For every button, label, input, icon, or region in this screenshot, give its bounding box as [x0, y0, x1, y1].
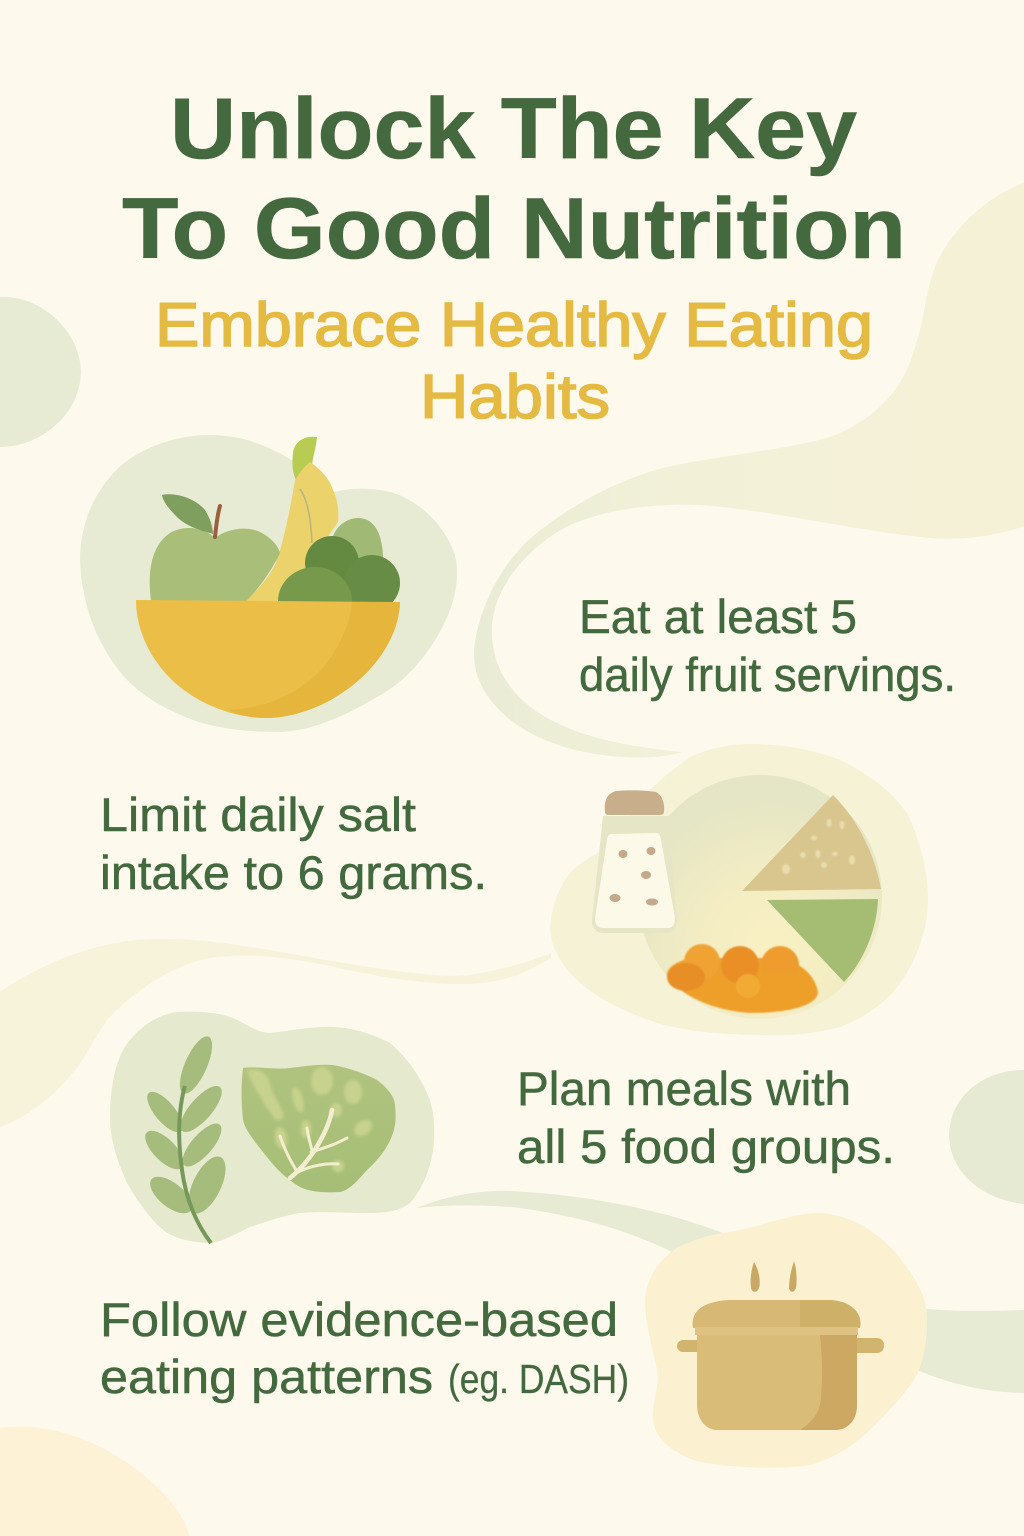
tip text: fruit servings [579, 590, 956, 701]
icon: herbs and leaf [110, 1012, 434, 1243]
dark green fruits [278, 536, 400, 635]
background wave: lower centre swoosh [416, 1191, 723, 1256]
title: Unlock The Key [170, 81, 857, 177]
tip text: plan meals: all 5 food groups. [517, 1120, 895, 1173]
tip text: fruit servings: daily fruit servings. [579, 648, 956, 701]
banana [245, 437, 338, 601]
orange food pile [667, 944, 818, 1013]
subtitle [155, 291, 873, 432]
icon: salt shaker and plate [550, 744, 928, 1035]
tip text: salt limit: intake to 6 grams. [100, 846, 487, 899]
pot lid shade [800, 1300, 860, 1328]
shaker glass [592, 816, 677, 933]
pot body [697, 1333, 857, 1430]
pot body shade [800, 1335, 857, 1430]
apple [150, 494, 280, 601]
tip text: salt limit [100, 788, 487, 899]
tip text: fruit servings: Eat at least 5 [579, 590, 857, 643]
pot handles [677, 1338, 884, 1353]
herbs backdrop blob [110, 1012, 434, 1243]
tip text: eating patterns: (eg. DASH) [448, 1356, 629, 1402]
grain specks [782, 819, 855, 874]
lettuce veins [280, 1110, 347, 1178]
back green fruit [331, 518, 383, 590]
background wave: lower right swoosh [905, 1308, 1024, 1393]
grain wedge [742, 795, 881, 891]
lettuce light patches [247, 1067, 375, 1172]
background wave: top right swoosh [474, 183, 1024, 757]
tip text: plan meals: Plan meals with [517, 1062, 851, 1115]
apple stem [215, 506, 220, 537]
title: To Good Nutrition [122, 181, 906, 277]
background blob: left edge [0, 297, 81, 447]
lettuce leaf [242, 1065, 396, 1192]
pot lid [693, 1300, 860, 1328]
plate backdrop blob [550, 744, 928, 1035]
shaker salt [595, 833, 675, 928]
tip text: eating patterns [100, 1293, 629, 1403]
tip text: plan meals [517, 1062, 895, 1173]
subtitle: Habits [420, 363, 610, 432]
sprig stem [179, 1086, 211, 1243]
fruit bowl backdrop blob [80, 435, 457, 732]
sprig leaves [139, 1032, 233, 1220]
steam [751, 1261, 797, 1292]
background wave: middle left swoosh [0, 939, 551, 1127]
plate [638, 775, 882, 1019]
icon: fruit bowl [80, 435, 457, 732]
tip text: eating patterns: eating patterns [100, 1350, 433, 1403]
title [122, 81, 906, 277]
pot lid band [695, 1327, 858, 1335]
subtitle: Embrace Healthy Eating [155, 291, 873, 360]
background blob: right edge [949, 1070, 1024, 1204]
bowl [136, 600, 400, 718]
icon: cooking pot [645, 1213, 927, 1468]
tip text: eating patterns: Follow evidence-based [100, 1293, 618, 1346]
bowl shade [228, 602, 400, 718]
green wedge [767, 899, 878, 982]
pot backdrop blob [645, 1213, 927, 1468]
background blob: bottom left corner [0, 1427, 190, 1536]
shaker lid [605, 790, 664, 815]
tip text: salt limit: Limit daily salt [100, 788, 416, 841]
shaker specks [610, 847, 658, 906]
apple leaf [162, 494, 213, 534]
